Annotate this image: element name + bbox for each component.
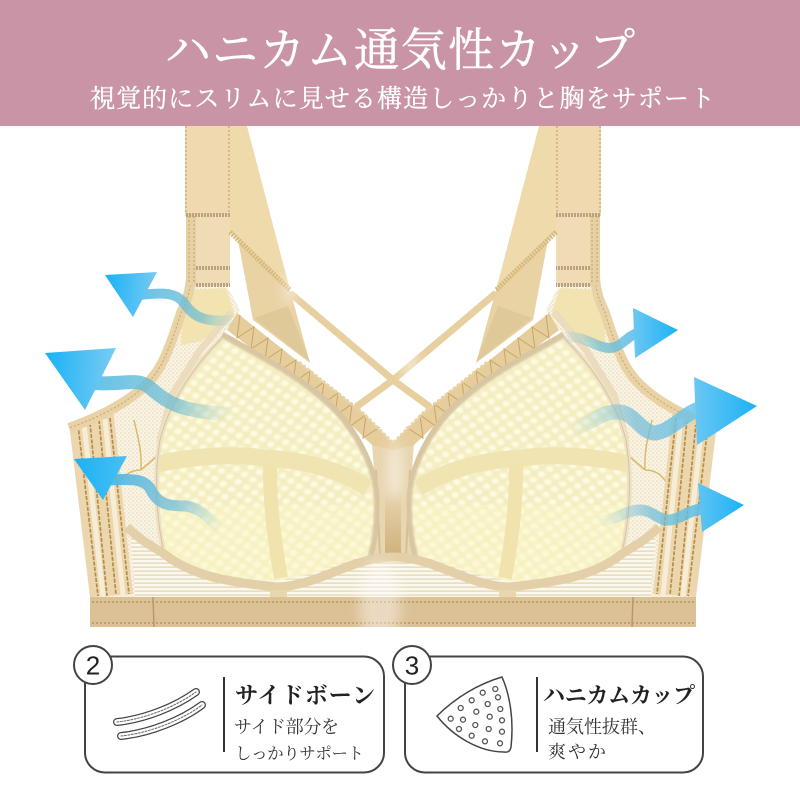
number badge 2: 2 xyxy=(86,650,100,680)
subtitle: 視覚的にスリムに見せる構造しっかりと胸をサポート xyxy=(90,85,715,113)
panel: side bone xyxy=(74,646,384,772)
card text: 爽やか xyxy=(548,742,606,762)
number badge 2 xyxy=(74,646,112,684)
icon: side bones xyxy=(117,692,202,736)
card text: 通気性抜群、 xyxy=(548,717,656,737)
arrow: airflow upper right xyxy=(565,308,678,358)
number badge 3: 3 xyxy=(405,650,419,680)
icon: cup pad with holes xyxy=(437,677,512,752)
card heading: サイドボーン xyxy=(235,683,375,708)
title: ハニカム通気性カップ xyxy=(165,25,635,76)
card text: しっかりサポート xyxy=(235,744,364,763)
arrow: airflow middle right xyxy=(570,377,757,445)
number badge 3 xyxy=(393,646,431,684)
card text: サイド部分を xyxy=(234,717,339,737)
arrow: airflow middle left xyxy=(45,348,232,414)
card heading: ハニカムカップ xyxy=(543,683,695,708)
product: bra with honeycomb cups xyxy=(69,126,717,650)
arrow: airflow lower right xyxy=(598,483,744,532)
arrow: airflow lower left xyxy=(74,456,222,530)
arrow: airflow upper left xyxy=(105,272,232,321)
divider xyxy=(536,677,538,752)
panel: honeycomb cup xyxy=(393,646,703,772)
divider xyxy=(223,677,225,752)
title banner xyxy=(0,0,800,126)
